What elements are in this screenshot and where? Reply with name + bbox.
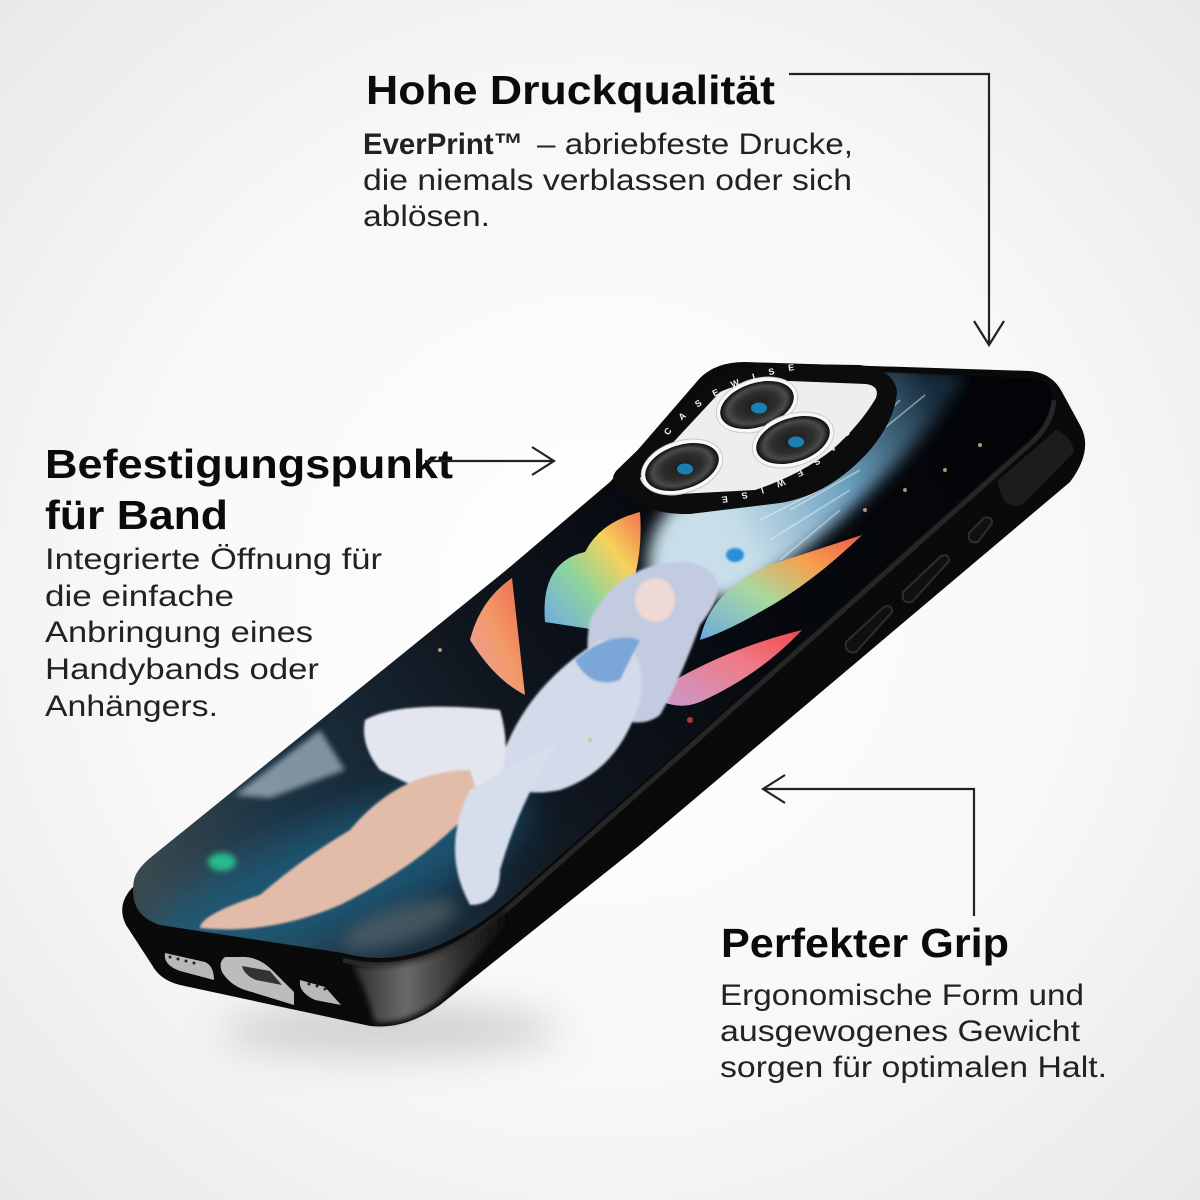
callout: strap mount — [45, 441, 554, 723]
body text: ablösen. — [363, 200, 490, 233]
strap slot — [998, 430, 1074, 506]
printed artwork — [133, 372, 1052, 958]
side buttons — [846, 518, 992, 652]
arrow — [789, 74, 1004, 345]
brand ring text — [664, 364, 850, 503]
arrow — [425, 447, 554, 475]
body text: die einfache — [45, 580, 234, 613]
body text: Integrierte Öffnung für — [45, 543, 382, 576]
heading: für Band — [45, 492, 228, 538]
brand ring text: CASEWISE — [722, 432, 850, 503]
artwork: river of light — [648, 365, 965, 600]
speaker left — [165, 953, 214, 980]
case body — [122, 362, 1085, 1027]
artwork: river streaks — [760, 395, 925, 560]
body text: ausgewogenes Gewicht — [720, 1015, 1081, 1048]
lens: left — [634, 429, 730, 505]
body text: Ergonomische Form und — [720, 979, 1084, 1012]
body text: sorgen für optimalen Halt. — [720, 1051, 1107, 1084]
charging port — [221, 957, 294, 1005]
speaker right — [300, 980, 341, 1005]
artwork: sparkles — [438, 443, 982, 742]
body text: die niemals verblassen oder sich — [363, 164, 852, 197]
body text — [720, 979, 1107, 1084]
heading: Befestigungspunkt — [45, 441, 453, 487]
body text: – abriebfeste Drucke, — [537, 128, 853, 161]
body text: Anbringung eines — [45, 616, 313, 649]
arrow — [763, 775, 974, 916]
artwork: fairy figure — [200, 548, 744, 929]
body text: Anhängers. — [45, 690, 218, 723]
phone case — [122, 362, 1086, 1026]
body text: Handybands oder — [45, 653, 319, 686]
glossy corner — [352, 910, 505, 1023]
camera island — [613, 364, 897, 514]
artwork: lower glow — [140, 779, 542, 952]
callout: grip — [720, 775, 1107, 1084]
body text: EverPrint™ — [363, 128, 523, 161]
callout: print quality — [363, 67, 1004, 345]
case rim highlight — [343, 400, 1054, 965]
body text — [45, 543, 382, 723]
heading: Perfekter Grip — [721, 920, 1009, 966]
brand ring text: CASEWISE — [664, 364, 794, 434]
lens: top — [709, 367, 805, 443]
artwork: wings — [470, 512, 862, 706]
body text — [363, 128, 853, 233]
lens: right — [745, 402, 841, 478]
phone shadow — [220, 1004, 560, 1056]
artwork: cloud — [235, 730, 345, 798]
heading — [45, 441, 453, 538]
heading: Hohe Druckqualität — [366, 67, 775, 113]
